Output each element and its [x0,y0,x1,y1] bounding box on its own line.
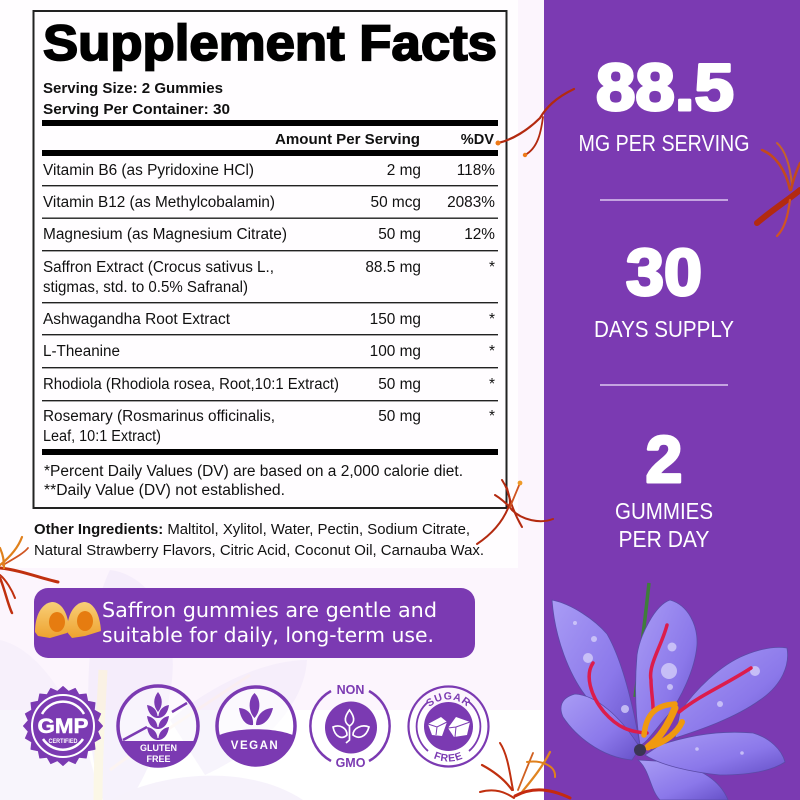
badge: non GMO: GMO [336,756,366,770]
stat: 30 days supply: 30 [626,235,702,309]
row: magnesium: Magnesium (as Magnesium Citrate) [43,226,287,243]
saffron flower [552,583,788,800]
faded background flower [0,570,307,800]
row: rhodiola: Rhodiola (Rhodiola rosea, Root,10:1 Extract) [43,376,339,393]
footnotes: **Daily Value (DV) not established. [44,482,285,499]
column header: DV: %DV [461,132,494,148]
stat: 2 gummies per day: PER DAY [618,526,710,552]
row: l-theanine: * [489,343,495,360]
row: l-theanine: L-Theanine [43,343,120,360]
row: vitamin B12: 50 mcg [371,194,421,211]
row: rosemary: Rosemary (Rosmarinus officinalis, [43,408,275,425]
icon: wheat [147,692,169,740]
stem [635,583,649,697]
row: saffron extract: * [489,259,495,276]
row: vitamin B12: Vitamin B12 (as Methylcobalamin) [43,194,275,211]
column header: amount: Amount Per Serving [275,132,420,148]
other ingredients: Natural Strawberry Flavors, Citric Acid, Coconut Oil, Carnauba Wax. [34,542,484,559]
badge: non GMO: NON [337,683,364,697]
row: vitamin B6: 2 mg [387,162,421,179]
serving size: Serving Size: 2 Gummies [43,81,223,97]
row: rosemary: Leaf, 10:1 Extract) [43,428,161,445]
other ingredients: Other Ingredients: Maltitol, Xylitol, Water, Pectin, Sodium Citrate, [34,521,470,538]
right purple panel [544,0,800,800]
saffron thread: right [757,143,800,236]
footnotes [44,463,463,499]
servings per container: Serving Per Container: 30 [43,102,230,118]
badge: gluten free: FREE [146,754,171,764]
icon: leaves [239,693,273,725]
badge: GMP certified: GMP [38,715,88,738]
stat: 88.5 mg per serving: MG PER SERVING [578,130,750,156]
row: saffron extract [43,259,495,296]
stat: 30 days supply: DAYS SUPPLY [594,316,734,342]
row: vitamin B6: 118% [457,162,495,179]
row: l-theanine: 100 mg [370,343,421,360]
row: rosemary: * [489,408,495,425]
row: ashwagandha [43,311,495,328]
red stigmas [589,625,751,733]
callout text: Saffron gummies are gentle and [102,598,437,622]
badge: sugar free: SUGAR [426,692,470,706]
saffron thread: top [496,89,574,157]
row: saffron extract: stigmas, std. to 0.5% Safranal) [43,279,248,296]
row: ashwagandha: Ashwagandha Root Extract [43,311,231,328]
row: rhodiola: 50 mg [378,376,421,393]
panel border [34,11,506,508]
petals [552,600,788,800]
badge: vegan: VEGAN [231,740,279,752]
row: ashwagandha: * [489,311,495,328]
row: rosemary [43,408,495,445]
row: vitamin B12: 2083% [447,194,495,211]
row: magnesium: 12% [464,226,495,243]
row: rhodiola [43,376,495,393]
white area behind the lower page [0,710,544,800]
badge: GMP certified: CERTIFIED [48,739,78,745]
orange anthers [644,704,682,747]
row: magnesium [43,226,495,243]
page background [0,0,544,800]
icon: sugar cubes [428,717,470,737]
stat: 30 days supply [594,235,734,342]
badge: sugar free [407,685,490,768]
badge: non GMO [310,683,390,770]
row: saffron extract: Saffron Extract (Crocus sativus L., [43,259,274,276]
row: l-theanine [43,343,495,360]
water drops [573,621,760,755]
badge: gluten free: GLUTEN [140,743,177,753]
supplement facts panel [34,11,506,508]
row: rhodiola: * [489,376,495,393]
row: ashwagandha: 150 mg [370,311,421,328]
row: magnesium: 50 mg [378,226,421,243]
flower centre [634,744,646,756]
stat: 2 gummies per day: 2 [646,422,682,496]
stat: 88.5 mg per serving: 88.5 [596,50,734,124]
row: vitamin B12 [43,194,495,211]
row: saffron extract: 88.5 mg [365,259,421,276]
row: rosemary: 50 mg [378,408,421,425]
badge: sugar free: FREE [434,752,462,762]
badge: gluten free [118,686,198,766]
badge: vegan [217,687,295,766]
footnotes: *Percent Daily Values (DV) are based on a 2,000 calorie diet. [44,463,463,480]
stat: 88.5 mg per serving [578,50,750,156]
icon: sprout [333,710,369,743]
thick rule header [42,150,498,156]
other ingredients [34,521,484,559]
saffron thread: left [0,537,58,613]
row: vitamin B6: Vitamin B6 (as Pyridoxine HCl) [43,162,254,179]
white area behind the table [0,0,518,568]
saffron thread: middle [477,480,553,544]
stat: 2 gummies per day: GUMMIES [615,498,713,524]
row: vitamin B6 [43,162,495,179]
stat: 2 gummies per day [615,422,713,552]
heading: Supplement Facts [43,15,497,71]
callout banner: suitable for daily, long-term use. [102,623,434,647]
thick rule bottom [42,449,498,455]
icon: gummies [35,602,101,638]
saffron thread: bottom [480,743,570,798]
badge: GMP certified [24,686,102,766]
thick rule top [42,120,498,126]
callout banner [34,588,475,658]
